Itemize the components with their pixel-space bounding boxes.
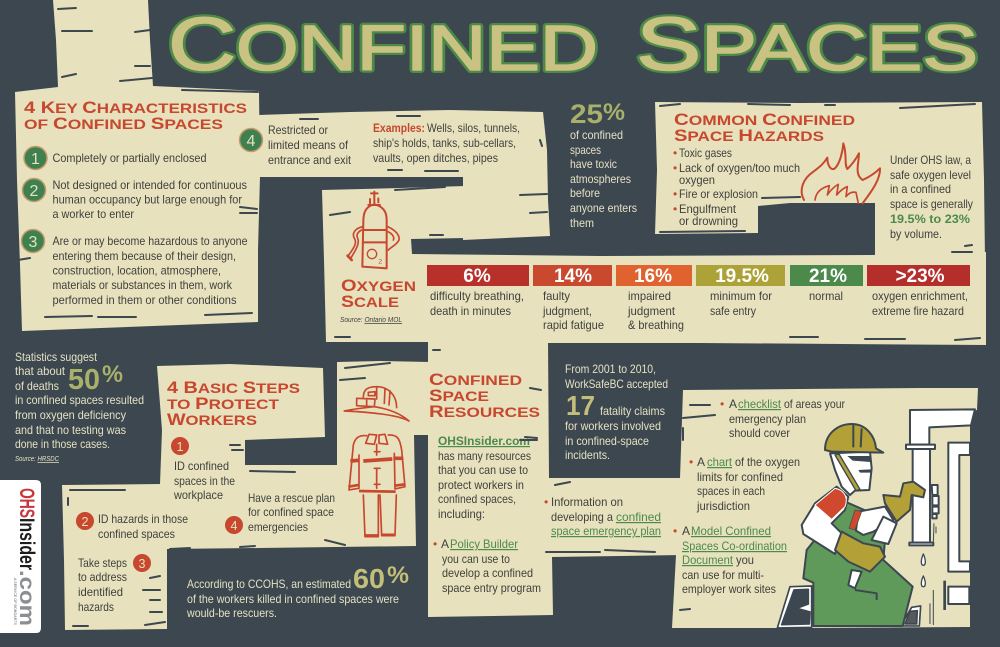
icon: oxygen tank [348, 192, 399, 268]
step 1: workplace [173, 488, 223, 502]
resource: checklist: • [720, 397, 724, 411]
safe oxygen level note: by volume. [890, 227, 942, 241]
panel: resources [428, 340, 682, 617]
safe oxygen level note: in a confined [890, 182, 951, 196]
stat: 17 fatality claims: for workers involved [565, 419, 661, 433]
examples text: ship's holds, tanks, sub-cellars, [373, 136, 516, 150]
resource: chart: jurisdiction [696, 499, 750, 513]
characteristic 4: limited means of [268, 138, 349, 152]
stat: 60% would-be rescuers: of the workers killed in confined spaces were [187, 592, 399, 606]
resource: checklist: should cover [729, 426, 790, 440]
scale item: 14% [533, 265, 612, 332]
scale item: >23%: extreme fire hazard [872, 304, 964, 318]
step 4 [225, 491, 335, 534]
heading: key characteristics: OF CONFINED SPACES [24, 115, 223, 133]
stat: 17 fatality claims: From 2001 to 2010, [565, 362, 656, 376]
step 4: emergencies [248, 520, 308, 534]
panel: oxygen scale [322, 186, 986, 345]
step 4: 4 [231, 519, 238, 533]
panel: key characteristics [15, 0, 260, 331]
step 3: Take steps [78, 556, 127, 570]
scale item: 14%: rapid fatigue [543, 318, 604, 332]
stat: 25% toxic atmospheres: of confined [570, 128, 623, 142]
panel: basic steps [62, 361, 430, 630]
hazard list: oxygen [679, 173, 715, 187]
scale item: 6%: difficulty breathing, [430, 289, 524, 303]
resources intro [438, 434, 531, 521]
step 2: 2 [82, 515, 89, 529]
scale item: 16% [616, 265, 692, 332]
hazard list: Fire or explosion [679, 187, 758, 201]
scale item: 16%: & breathing [628, 318, 684, 332]
step 4: for confined space [248, 505, 334, 519]
scale item: >23% [867, 265, 970, 318]
stat: 17 fatality claims: WorkSafeBC accepted [565, 377, 668, 391]
illustration: worker with wrench at pipe [777, 409, 975, 628]
safe oxygen level note: safe oxygen level [890, 168, 971, 182]
examples text [373, 121, 520, 165]
panel: worker and resources [672, 388, 978, 628]
heading: hazards: SPACE HAZARDS [674, 127, 824, 145]
safe oxygen level note: 19.5% to 23% [890, 212, 970, 226]
scale item: 16%: judgment [627, 304, 676, 318]
step 1: spaces in the [174, 474, 235, 488]
stat: 25% toxic atmospheres [570, 99, 637, 230]
step 2: ID hazards in those [98, 512, 188, 526]
scale item: 14%: faulty [543, 289, 570, 303]
stat: 25% toxic atmospheres: before [570, 186, 600, 200]
hazard list: • [673, 146, 677, 160]
characteristic 4: 4 [247, 133, 256, 150]
heading: resources: RESOURCES [429, 403, 540, 421]
characteristic 4: entrance and exit [268, 153, 352, 167]
stat: 50% of deaths: Statistics suggest [15, 350, 98, 364]
scale item: >23%: oxygen enrichment, [872, 289, 968, 303]
characteristic 1: Completely or partially enclosed [52, 151, 206, 165]
characteristic 3 [22, 230, 248, 307]
scale item: 19.5%: minimum for [710, 289, 772, 303]
title [168, 2, 978, 86]
heading: basic steps: 4 B ASIC STEPS [167, 379, 300, 397]
heading: resources: CONFINED [429, 371, 522, 389]
examples text: Examples: [373, 121, 425, 135]
resource: model document: A [682, 524, 690, 538]
hazard list: • [673, 187, 677, 201]
stat: 60% would-be rescuers: % [387, 562, 409, 589]
hazard list: Toxic gases [679, 146, 732, 160]
heading: basic steps: WORKERS [167, 411, 257, 429]
stat: 25% toxic atmospheres: % [603, 99, 625, 126]
pipe and door frame [906, 409, 975, 625]
resource: emergency plan [544, 495, 661, 538]
step 3 [78, 554, 151, 614]
characteristic 1 [24, 146, 206, 170]
step 3: identified [78, 585, 123, 599]
scale item: >23%: >23% [895, 266, 945, 287]
panel: examples [240, 110, 550, 240]
logo: OHSInsider.com [0, 480, 41, 633]
resource: chart: of the oxygen [735, 455, 800, 469]
scale item: 16%: impaired [628, 289, 671, 303]
stat: 25% toxic atmospheres: anyone enters [570, 201, 637, 215]
step 3: 3 [139, 557, 146, 571]
resources intro: OHSInsider.com [438, 434, 530, 448]
stat: 50% of deaths: % [102, 361, 123, 388]
resource: policy builder: space entry program [442, 581, 541, 595]
scale item: 19.5% [696, 265, 785, 318]
hazard list [673, 146, 800, 228]
resource: model document: Document [682, 553, 734, 567]
resource: policy builder: develop a confined [442, 566, 533, 580]
resource: model document: can use for multi- [682, 568, 764, 582]
title: CONFINED [168, 2, 598, 86]
stat: 17 fatality claims: incidents. [565, 448, 610, 462]
resource: emergency plan: confined [616, 510, 661, 524]
resource: policy builder: you can use to [442, 552, 510, 566]
stat: 50% of deaths: of deaths [15, 379, 59, 393]
heading: oxygen scale [341, 277, 416, 311]
resource: checklist: A [729, 397, 737, 411]
resource: emergency plan: space emergency plan [551, 524, 661, 538]
helmet and head [825, 424, 883, 495]
boots [777, 586, 921, 628]
characteristic 4 [240, 123, 352, 167]
scale item: 21%: 21% [809, 266, 847, 287]
heading: key characteristics [24, 99, 247, 133]
characteristic 2: human occupancy but large enough for [52, 192, 242, 206]
heading: hazards: COMMON CONFINED [674, 111, 855, 129]
resource: checklist [720, 397, 845, 440]
hazard list: or drowning [679, 214, 738, 228]
logo: OHSInsider.com: .com [15, 570, 38, 626]
logo: OHSInsider.com: OHS [15, 488, 38, 518]
step 2 [76, 512, 188, 541]
stat: 50% of deaths [15, 350, 144, 463]
characteristic 4: Restricted or [268, 123, 328, 137]
source note: Source: Ontario MOL [340, 315, 402, 324]
characteristic 3: construction, location, atmosphere, [52, 264, 221, 278]
stat: 50% of deaths: done in those cases. [15, 437, 110, 451]
stat: 17 fatality claims: in confined-space [565, 434, 649, 448]
resource: policy builder [433, 537, 541, 595]
resource: policy builder: • [433, 537, 437, 551]
resource: model document: Model Confined [691, 524, 771, 538]
resources intro: confined spaces, [438, 492, 516, 506]
stat: 60% would-be rescuers: According to CCOHS, an estimated [187, 577, 351, 591]
logo: OHSInsider.com: A SERVICE OF BONGARTS [13, 578, 17, 626]
resource: model document: you [736, 553, 754, 567]
icon: firefighter gear [344, 387, 409, 537]
scale item: 21%: normal [809, 289, 843, 303]
title: SPACES [636, 2, 978, 86]
stat: 50% of deaths: 50 [68, 364, 100, 396]
stat: 50% of deaths: in confined spaces resulted [15, 393, 144, 407]
resources intro: protect workers in [438, 478, 524, 492]
hazard list: Lack of oxygen/too much [679, 161, 800, 175]
resource: model document: • [673, 524, 677, 538]
stat: 25% toxic atmospheres: atmospheres [570, 172, 631, 186]
panel: hazards [655, 102, 985, 260]
resource: chart: chart [707, 455, 733, 469]
title: SPACES [636, 2, 978, 86]
stat: 25% toxic atmospheres: 25 [570, 99, 603, 129]
heading: basic steps: TO PROTECT [167, 395, 280, 413]
step 2: confined spaces [98, 527, 175, 541]
characteristic 2: Not designed or intended for continuous [52, 178, 247, 192]
resource: emergency plan: developing a [551, 510, 613, 524]
resource: checklist: checklist [738, 397, 782, 411]
safe oxygen level note [890, 153, 973, 241]
icon: flame [802, 143, 880, 203]
safe oxygen level note: space is generally [890, 197, 973, 211]
step 1 [171, 437, 235, 502]
scale item: 16%: 16% [634, 266, 672, 287]
resource: model document [673, 524, 787, 596]
hazard list: Engulfment [679, 202, 737, 216]
characteristic 3: materials or substances in them, work [52, 278, 233, 292]
resource: policy builder: Policy Builder [450, 537, 518, 551]
resource: model document: employer work sites [682, 582, 776, 596]
characteristic 2: 2 [30, 183, 39, 200]
stat: 17 fatality claims: fatality claims [600, 404, 665, 418]
scale item: 19.5%: safe entry [710, 304, 756, 318]
resource: chart: • [689, 455, 693, 469]
icon: oxygen tank: 2 [378, 258, 382, 265]
stat: 60% would-be rescuers: 60 [353, 563, 385, 594]
stat: 50% of deaths: from oxygen deficiency [15, 408, 126, 422]
step 3: to address [78, 570, 127, 584]
characteristic 3: 3 [29, 234, 38, 251]
step 3: hazards [78, 600, 114, 614]
heading: key characteristics: 4 K EY CHARACTERISTICS [24, 99, 247, 117]
stat: 25% toxic atmospheres: spaces [570, 143, 601, 157]
stat: 25% toxic atmospheres: have toxic [570, 157, 617, 171]
scale item: 14%: 14% [554, 266, 592, 287]
resource: emergency plan: • [544, 495, 548, 509]
resource: chart: spaces in each [697, 484, 765, 498]
stat: 50% of deaths: that about [15, 364, 66, 378]
step 4: Have a rescue plan [248, 491, 335, 505]
resource: checklist: of areas your [784, 397, 845, 411]
resource: emergency plan: Information on [551, 495, 623, 509]
characteristic 2 [22, 178, 247, 221]
characteristic 2: a worker to enter [52, 207, 134, 221]
title: CONFINED [168, 2, 598, 86]
step 1: 1 [177, 440, 184, 454]
resource: chart [689, 455, 800, 513]
scale item: 6%: death in minutes [430, 304, 511, 318]
scale item: 6%: 6% [463, 266, 491, 287]
stat: 17 fatality claims [565, 362, 668, 462]
stat: 25% toxic atmospheres: them [570, 216, 594, 230]
resource: policy builder: A [441, 537, 449, 551]
resources intro: that you can use to [438, 463, 528, 477]
hazard list: • [673, 202, 677, 216]
characteristic 1: 1 [31, 151, 40, 168]
scale item: 19.5%: 19.5% [715, 266, 769, 287]
scale item: 14%: judgment, [542, 304, 592, 318]
characteristic 3: entering them because of their design, [52, 249, 236, 263]
stat: 60% would-be rescuers [186, 562, 409, 620]
heading: resources: SPACE [429, 387, 489, 405]
examples text: Wells, silos, tunnels, [427, 121, 520, 135]
green overalls [803, 500, 913, 626]
scale item: 6% [427, 265, 529, 318]
heading: basic steps [167, 379, 300, 429]
resources intro: including: [438, 507, 485, 521]
logo: OHSInsider.com: Insider [15, 518, 38, 570]
heading: hazards [674, 111, 855, 145]
heading: oxygen scale: OXYGEN [341, 277, 416, 295]
resource: chart: A [697, 455, 705, 469]
hazard list: • [673, 161, 677, 175]
stat: 50% of deaths: and that no testing was [15, 423, 126, 437]
arms, gloves and wrench [802, 482, 925, 600]
examples text: vaults, open ditches, pipes [373, 151, 498, 165]
stat: 60% would-be rescuers: would-be rescuers. [186, 606, 277, 620]
resources intro: has many resources [438, 449, 531, 463]
stat: 50% of deaths: Source: HRSDC [15, 454, 59, 463]
stat: 17 fatality claims: 17 [566, 390, 595, 421]
resource: checklist: emergency plan [729, 412, 806, 426]
safe oxygen level note: Under OHS law, a [890, 153, 971, 167]
characteristic 3: performed in them or other conditions [52, 293, 236, 307]
heading: oxygen scale: SCALE [341, 293, 399, 311]
characteristic 3: Are or may become hazardous to anyone [52, 234, 248, 248]
resource: chart: limits for confined [697, 470, 783, 484]
step 1: ID confined [174, 459, 229, 473]
heading: resources [429, 371, 540, 421]
scale item: 21% [790, 265, 863, 303]
resource: model document: Spaces Co-ordination [682, 539, 787, 553]
